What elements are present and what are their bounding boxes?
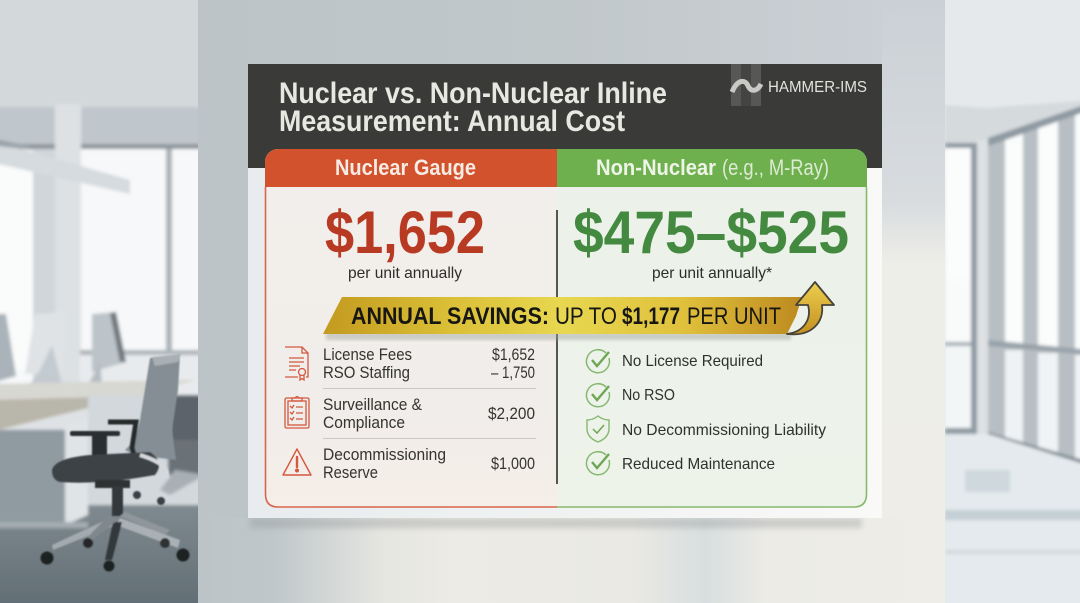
benefit: no license: No License Required <box>622 353 763 370</box>
savings banner: PER UNIT <box>687 303 781 330</box>
savings banner: UP TO <box>555 303 617 330</box>
row: license and RSO: RSO Staffing <box>323 364 410 382</box>
icon: clipboard <box>285 396 309 428</box>
comparison panel <box>265 149 867 508</box>
cost table <box>283 346 536 482</box>
logo: Hammer-IMS: HAMMER-IMS <box>768 79 867 96</box>
savings banner <box>323 282 834 340</box>
icon: up arrow <box>787 282 834 334</box>
row: license and RSO <box>323 346 535 382</box>
heading: non-nuclear: (e.g., M-Ray) <box>722 155 829 180</box>
row: surveillance: $2,200 <box>488 405 535 423</box>
header band <box>248 64 882 168</box>
title: Nuclear vs. Non-Nuclear Inline <box>279 77 667 110</box>
benefit: reduced maintenance <box>586 452 775 475</box>
row: surveillance <box>323 396 535 432</box>
row: license and RSO: $1,652 <box>492 346 535 364</box>
benefit: no decommissioning: No Decommissioning Liability <box>622 422 826 439</box>
savings banner: $1,177 <box>622 303 680 330</box>
background: blurred windows right <box>945 0 1080 603</box>
row: decommissioning: $1,000 <box>491 455 535 473</box>
icon: license document <box>285 347 308 380</box>
savings banner: ANNUAL SAVINGS: <box>351 303 549 330</box>
background: wall <box>198 0 945 603</box>
price: nuclear: $1,652 <box>325 199 485 266</box>
benefits list <box>586 350 826 475</box>
center divider <box>556 210 558 484</box>
title <box>279 77 667 138</box>
title: Measurement: Annual Cost <box>279 105 625 138</box>
benefit: no license <box>586 350 763 373</box>
board <box>248 64 882 518</box>
heading: non-nuclear <box>596 155 829 180</box>
logo: Hammer-IMS <box>731 64 867 106</box>
price: non-nuclear: per unit annually* <box>652 265 772 282</box>
row: surveillance: Compliance <box>323 414 405 432</box>
icon: warning triangle <box>283 449 311 475</box>
right panel border <box>557 187 866 507</box>
benefit: no RSO: No RSO <box>622 387 675 404</box>
row: decommissioning: Reserve <box>323 464 378 482</box>
row: license and RSO: – 1,750 <box>491 364 535 382</box>
left panel border <box>266 187 557 507</box>
row: decommissioning: Decommissioning <box>323 446 446 464</box>
left and right panel fills <box>265 149 867 508</box>
heading: nuclear gauge: Nuclear Gauge <box>335 155 476 180</box>
row: decommissioning <box>323 446 535 482</box>
price: non-nuclear: $475–$525 <box>573 199 849 266</box>
price: nuclear: per unit annually <box>348 265 462 282</box>
row: license and RSO: License Fees <box>323 346 412 364</box>
benefit: no decommissioning <box>587 416 826 442</box>
benefit: no RSO <box>586 384 675 407</box>
background: blurred office left <box>0 0 210 603</box>
board shadow <box>250 518 862 528</box>
heading: non-nuclear: Non-Nuclear <box>596 155 716 180</box>
row: surveillance: Surveillance & <box>323 396 422 414</box>
board background <box>248 64 882 518</box>
benefit: reduced maintenance: Reduced Maintenance <box>622 456 775 473</box>
